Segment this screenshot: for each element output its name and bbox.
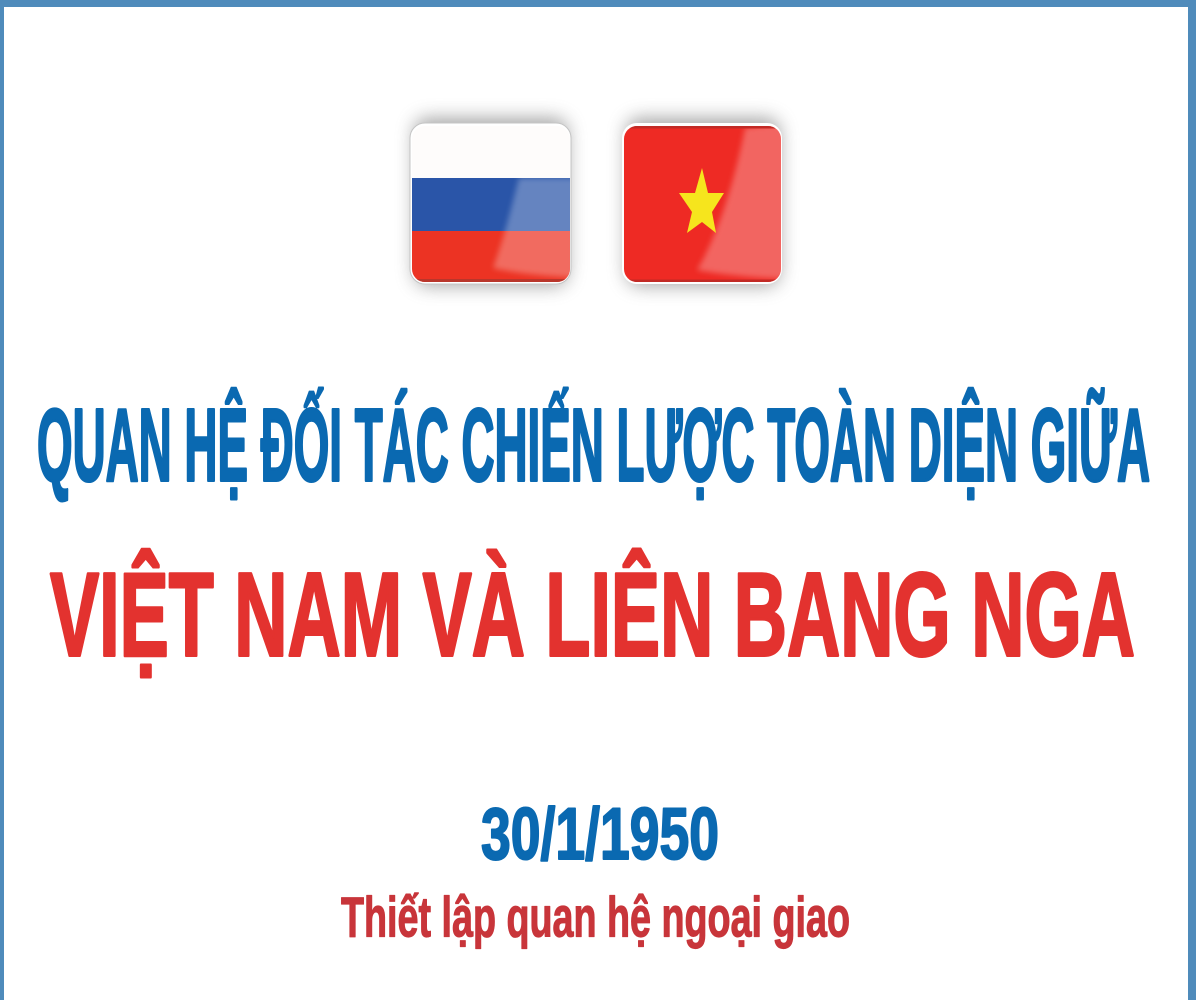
- date: 30/1/1950: [481, 794, 719, 875]
- icon: yellow star: [679, 168, 724, 233]
- icon: Russian flag: [410, 118, 578, 286]
- subtitle: Thiết lập quan hệ ngoại giao: [341, 886, 850, 950]
- icon: Vietnamese flag: [622, 118, 790, 286]
